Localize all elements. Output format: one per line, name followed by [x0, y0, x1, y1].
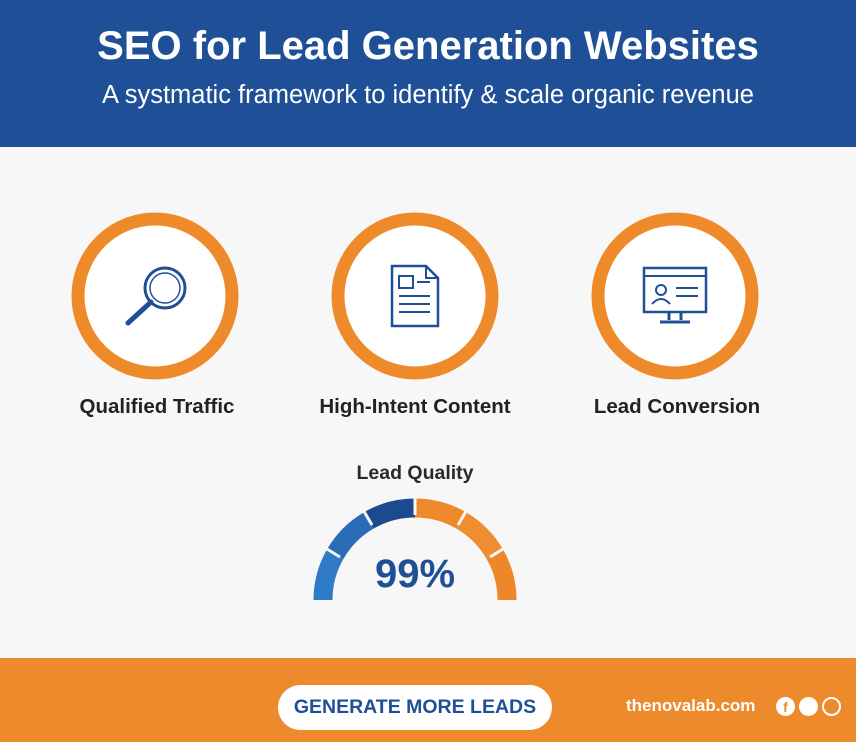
icon: magnifier [78, 219, 232, 373]
button: generate more leads [278, 685, 552, 730]
subtitle: A systmatic framework to identify & scale organic revenue [102, 81, 754, 109]
social icons: f [783, 699, 788, 715]
button: generate more leads: GENERATE MORE LEADS [294, 696, 536, 718]
label: lead conversion: Lead Conversion [594, 395, 760, 418]
title: SEO for Lead Generation Websites [97, 24, 759, 68]
gauge heading: Lead Quality [356, 462, 474, 484]
footer [0, 658, 856, 742]
label: high-intent content: High-Intent Content [319, 395, 511, 418]
gauge value: 99% [375, 552, 455, 596]
label: qualified traffic: Qualified Traffic [80, 395, 234, 418]
icons row [72, 212, 758, 380]
header [0, 0, 856, 147]
gauge chart [314, 498, 516, 600]
icon: document [338, 219, 492, 373]
icon: monitor [598, 219, 752, 373]
website url: thenovalab.com [626, 696, 755, 715]
social icons [776, 697, 841, 716]
